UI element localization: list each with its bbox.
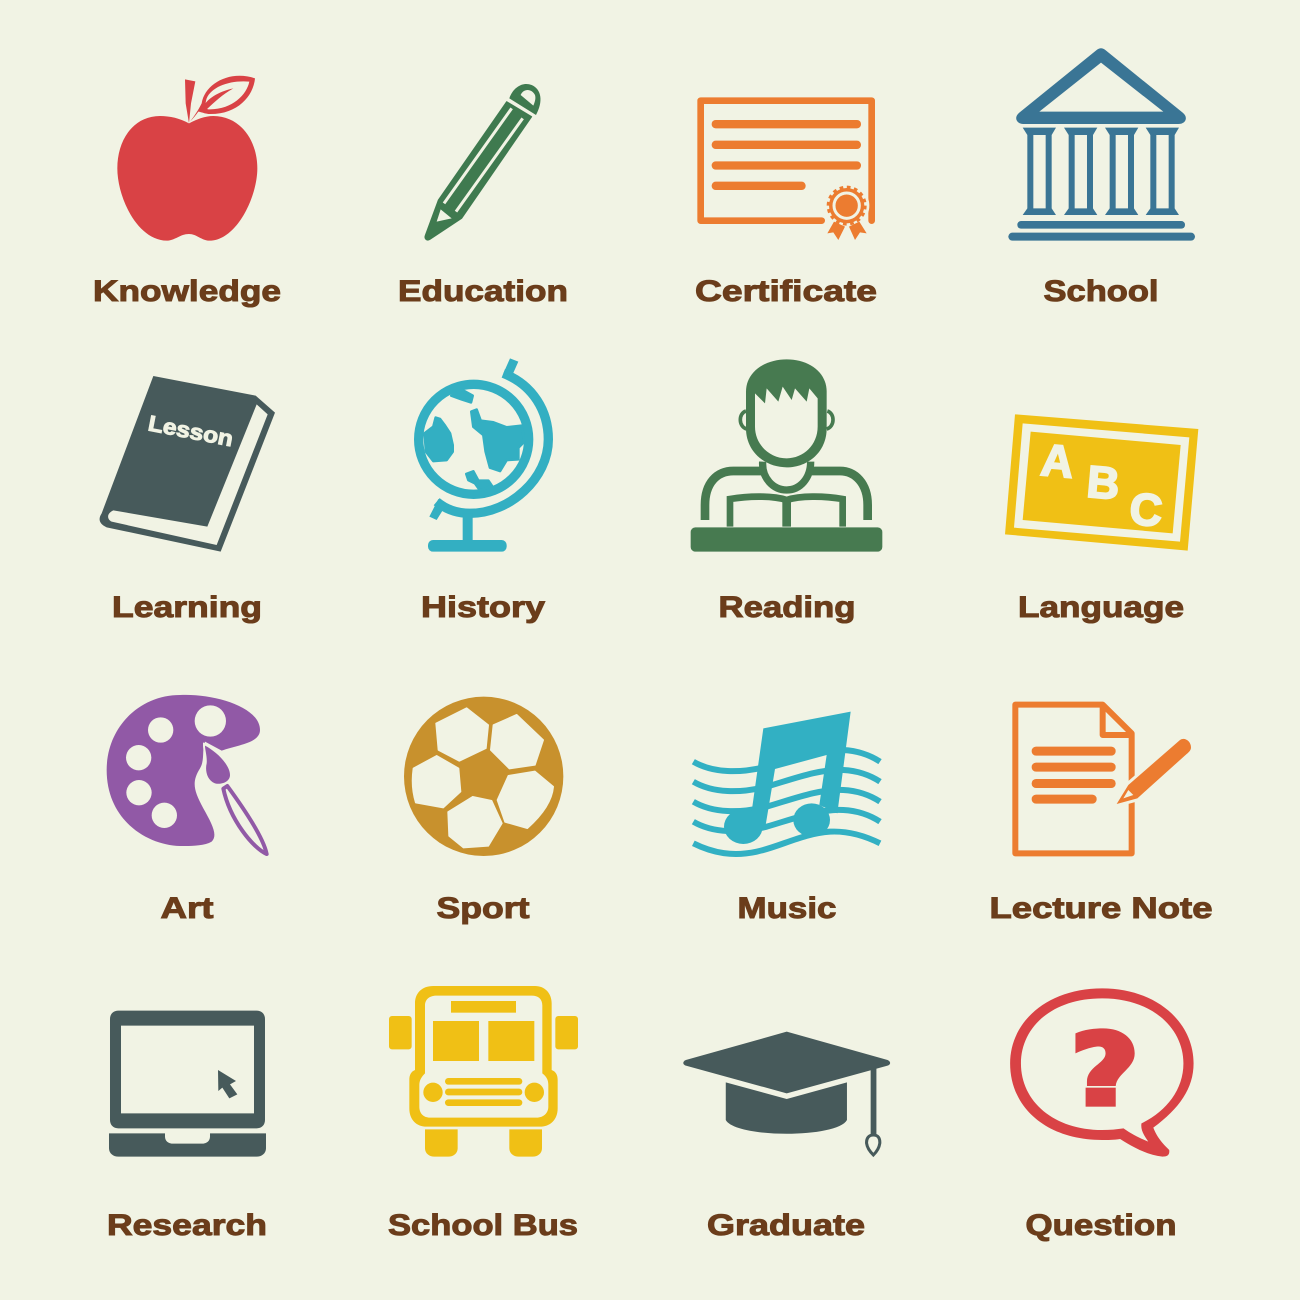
icon: pencil xyxy=(425,84,541,240)
icon: school bus xyxy=(389,986,578,1157)
label: Knowledge: Knowledge xyxy=(93,275,281,308)
label: Lecture Note: Lecture Note xyxy=(990,892,1212,925)
icon: book xyxy=(100,376,275,552)
icon: book: Lesson xyxy=(146,410,235,451)
icon: graduation cap xyxy=(683,1032,890,1155)
icon: laptop xyxy=(109,1011,266,1157)
label: Education: Education xyxy=(398,275,568,308)
icon: chalkboard ABC: B xyxy=(1085,456,1122,509)
icon: certificate xyxy=(701,101,872,240)
icon: chalkboard ABC: A xyxy=(1039,434,1076,488)
icon: reader xyxy=(691,359,882,552)
label: Question: Question xyxy=(1026,1209,1176,1242)
label: Graduate: Graduate xyxy=(707,1209,865,1242)
icon: apple xyxy=(117,76,257,241)
label: Sport: Sport xyxy=(436,892,530,925)
icon: palette xyxy=(107,695,267,854)
icon: chalkboard ABC: C xyxy=(1128,483,1164,536)
label: Language: Language xyxy=(1018,591,1184,624)
label: Research: Research xyxy=(107,1209,267,1242)
label: Learning: Learning xyxy=(112,591,262,624)
icon: school building xyxy=(1008,48,1195,241)
label: Reading: Reading xyxy=(718,591,856,624)
label: School: School xyxy=(1044,275,1158,308)
icon: globe xyxy=(419,358,548,552)
icon: music note xyxy=(693,712,880,854)
label: School Bus: School Bus xyxy=(388,1209,578,1242)
icon: lecture note xyxy=(1015,705,1191,853)
icon: chalkboard ABC xyxy=(1005,414,1198,551)
label: Certificate: Certificate xyxy=(695,275,877,308)
icon: question bubble xyxy=(1010,988,1194,1157)
label: History: History xyxy=(421,591,545,624)
icon: soccer ball xyxy=(404,697,563,856)
label: Music: Music xyxy=(738,892,836,925)
label: Art: Art xyxy=(160,892,214,925)
